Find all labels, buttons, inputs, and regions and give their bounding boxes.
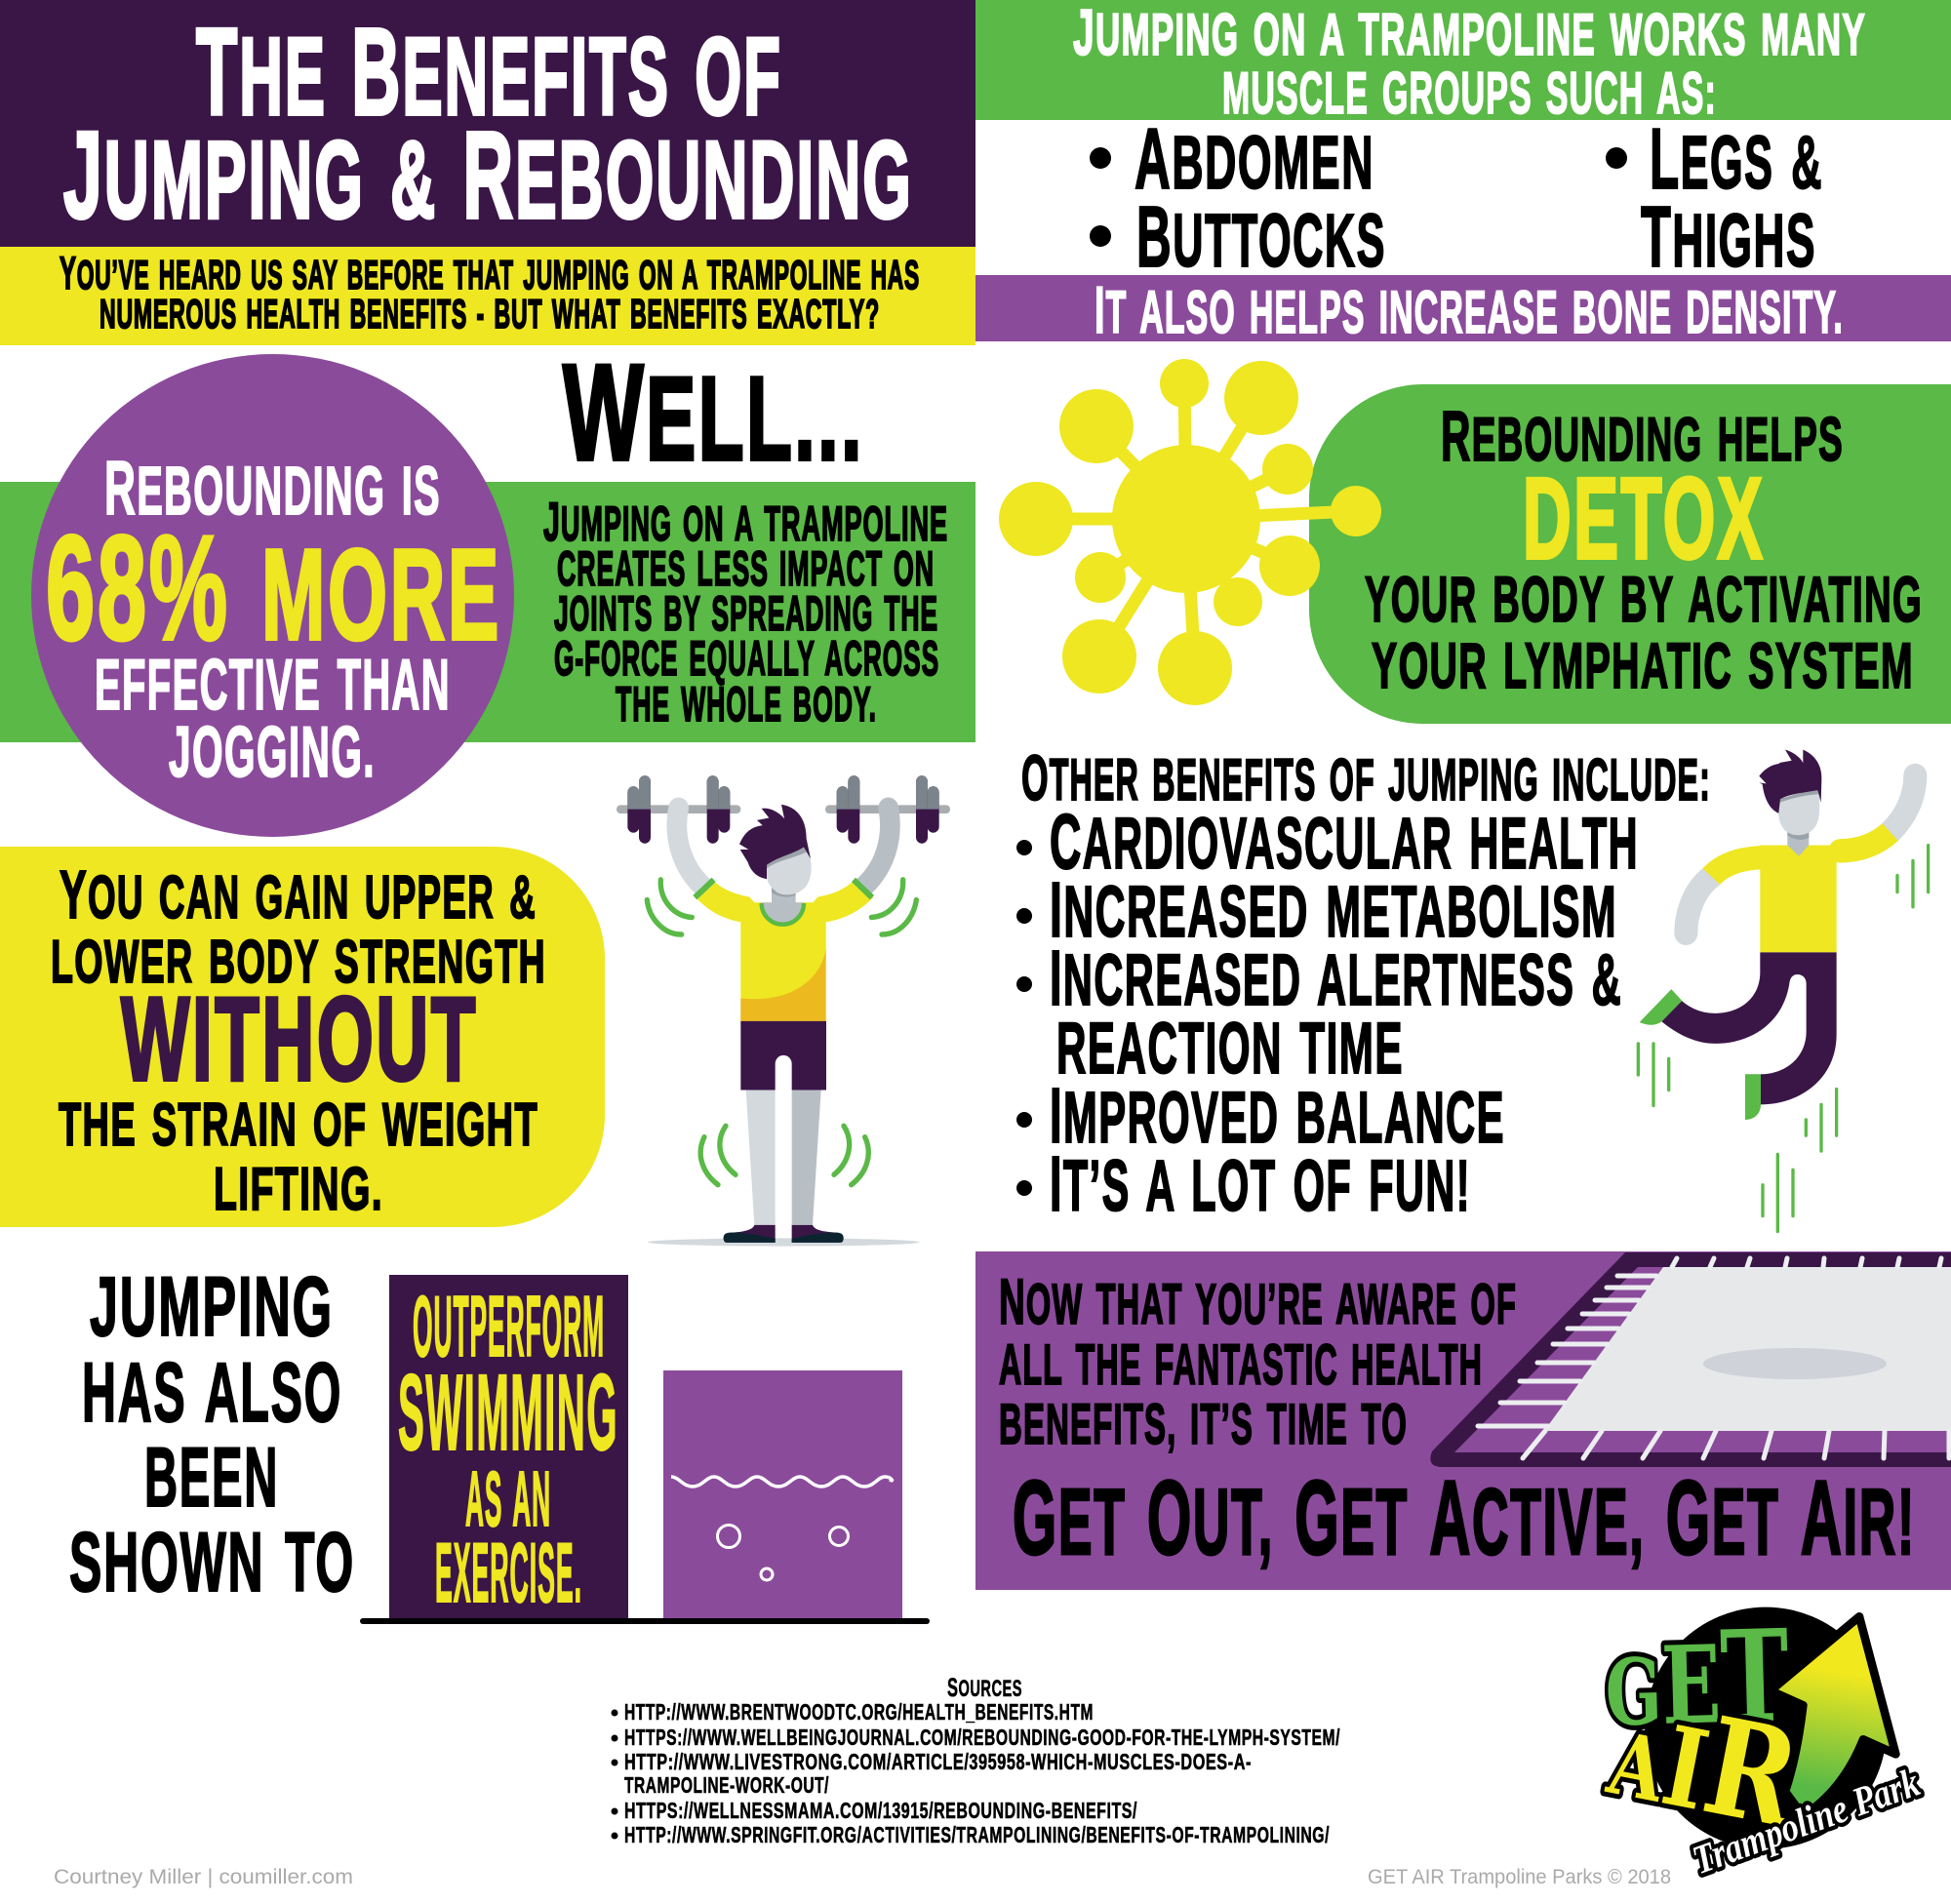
sources: HTTP://WWW.BRENTWOODTC.ORG/HEALTH_BENEFITS.HTM — [624, 1699, 1094, 1725]
panel: swimming comparison: SWIMMING — [398, 1353, 618, 1473]
sources: SOURCES — [947, 1673, 1022, 1702]
detox text — [1365, 398, 1923, 701]
barbell right — [825, 775, 950, 844]
muscle list — [1090, 110, 1823, 285]
panel: other benefits list — [1016, 741, 1711, 1227]
panel: muscle groups — [976, 0, 1951, 347]
intro text: NUMEROUS HEALTH BENEFITS - BUT WHAT BENEFITS EXACTLY? — [100, 291, 880, 337]
icon: yellow virus — [999, 359, 1381, 705]
purple pool bar — [663, 1370, 902, 1620]
panel: title header — [0, 0, 976, 247]
impact text: G-FORCE EQUALLY ACROSS — [554, 631, 939, 686]
muscle list: LEGS & — [1650, 110, 1823, 207]
panel: yellow intro band — [0, 247, 976, 345]
strength text: WITHOUT — [121, 972, 478, 1105]
panel: strength yellow pill — [0, 847, 605, 1227]
illustration: weight lifter — [617, 775, 950, 1247]
panel: green impact band — [0, 482, 976, 742]
detox text: DETOX — [1523, 455, 1765, 583]
right arm — [1841, 775, 1915, 851]
illustration: jumping person — [1638, 750, 1929, 1231]
logo: get air trampoline park — [1598, 1601, 1926, 1884]
circle text: JOGGING. — [169, 713, 376, 792]
circle text — [46, 445, 501, 792]
shoes — [1640, 989, 1761, 1120]
impact text — [543, 491, 948, 732]
strength text: LOWER BODY STRENGTH — [51, 929, 546, 996]
barbell left — [617, 775, 740, 844]
circle text: EFFECTIVE THAN — [95, 646, 451, 725]
slogan: GET OUT, GET ACTIVE, GET AIR! — [1013, 1458, 1916, 1576]
impact text: JUMPING ON A TRAMPOLINE — [543, 491, 948, 552]
panel: purple circle 68 percent — [31, 354, 514, 837]
swimming lead text: HAS ALSO — [82, 1346, 342, 1440]
strength text: YOU CAN GAIN UPPER & — [60, 856, 537, 932]
hair — [739, 805, 811, 879]
arms — [677, 808, 890, 889]
face — [1778, 789, 1819, 835]
swimming lead text: JUMPING — [90, 1260, 334, 1354]
motion lines — [1638, 846, 1929, 1231]
logo arrow — [1771, 1616, 1895, 1816]
title: THE BENEFITS OF — [196, 3, 782, 140]
neck — [1787, 830, 1809, 856]
heading: well: WELL... — [563, 336, 864, 489]
sources: TRAMPOLINE-WORK-OUT/ — [624, 1772, 829, 1798]
head — [767, 846, 812, 894]
muscle list: BUTTOCKS — [1136, 188, 1386, 285]
strength text: LIFTING. — [214, 1156, 383, 1223]
benefit items: REACTION TIME — [1056, 1008, 1404, 1089]
torso — [1760, 846, 1837, 952]
panel: call to action — [976, 1251, 1951, 1590]
sources: HTTPS://WELLNESSMAMA.COM/13915/REBOUNDING-BENEFITS/ — [624, 1798, 1137, 1823]
legs — [746, 1090, 821, 1225]
title — [63, 3, 913, 244]
call to action text — [999, 1265, 1517, 1456]
hair — [1759, 750, 1821, 813]
shoes — [724, 1225, 844, 1243]
circle text: REBOUNDING IS — [104, 445, 441, 531]
circle text: 68% MORE — [46, 505, 501, 671]
muscle list: THIGHS — [1641, 188, 1816, 285]
muscle list: ABDOMEN — [1135, 110, 1374, 207]
sources: HTTPS://WWW.WELLBEINGJOURNAL.COM/REBOUNDING-GOOD-FOR-THE-LYMPH-SYSTEM/ — [624, 1725, 1340, 1750]
impact text: JOINTS BY SPREADING THE — [554, 586, 938, 641]
call to action text: NOW THAT YOU’RE AWARE OF — [999, 1265, 1517, 1337]
sources: HTTP://WWW.SPRINGFIT.ORG/ACTIVITIES/TRAMPOLINING/BENEFITS-OF-TRAMPOLINING/ — [624, 1822, 1330, 1847]
benefit items: IT’S A LOT OF FUN! — [1050, 1140, 1471, 1227]
panel: swimming comparison — [69, 1260, 930, 1624]
logo air: AIR — [1598, 1670, 1812, 1859]
trousers — [1661, 952, 1837, 1104]
dark bar — [389, 1275, 628, 1620]
impact text: THE WHOLE BODY. — [616, 677, 877, 732]
icon: trampoline — [1430, 1252, 1951, 1467]
footer credit right: GET AIR Trampoline Parks © 2018 — [1368, 1866, 1671, 1888]
call to action text: ALL THE FANTASTIC HEALTH — [999, 1333, 1483, 1397]
sources — [611, 1673, 1340, 1847]
intro text — [60, 247, 920, 337]
left arm — [1686, 857, 1772, 933]
call to action text: BENEFITS, IT’S TIME TO — [999, 1393, 1408, 1456]
footer credit left: Courtney Miller | coumiller.com — [54, 1866, 353, 1888]
benefit items — [1016, 798, 1639, 1227]
shirt — [695, 880, 873, 1021]
title: JUMPING & REBOUNDING — [63, 106, 913, 244]
impact text: CREATES LESS IMPACT ON — [557, 541, 935, 596]
shorts — [740, 1021, 826, 1090]
neck and collar — [761, 883, 804, 925]
dark bar: AS AN — [465, 1455, 551, 1542]
benefit items: IMPROVED BALANCE — [1050, 1072, 1505, 1159]
muscle groups heading — [1073, 0, 1866, 126]
motion arcs — [647, 880, 916, 1185]
swimming lead text: BEEN — [144, 1431, 279, 1525]
panel: swimming comparison: OUTPERFORM — [413, 1278, 605, 1374]
sources: HTTP://WWW.LIVESTRONG.COM/ARTICLE/395958-WHICH-MUSCLES-DOES-A- — [624, 1749, 1252, 1774]
panel: swimming comparison: EXERCISE. — [435, 1527, 582, 1620]
strength text: THE STRAIN OF WEIGHT — [59, 1091, 538, 1159]
swimming lead text — [69, 1260, 355, 1609]
panel: detox green pill — [1309, 384, 1951, 724]
intro text: YOU’VE HEARD US SAY BEFORE THAT JUMPING ON A TRAMPOLINE HAS — [60, 247, 920, 298]
strength text — [51, 856, 546, 1223]
swimming lead text: SHOWN TO — [69, 1516, 355, 1609]
logo get: GET — [1603, 1601, 1791, 1755]
